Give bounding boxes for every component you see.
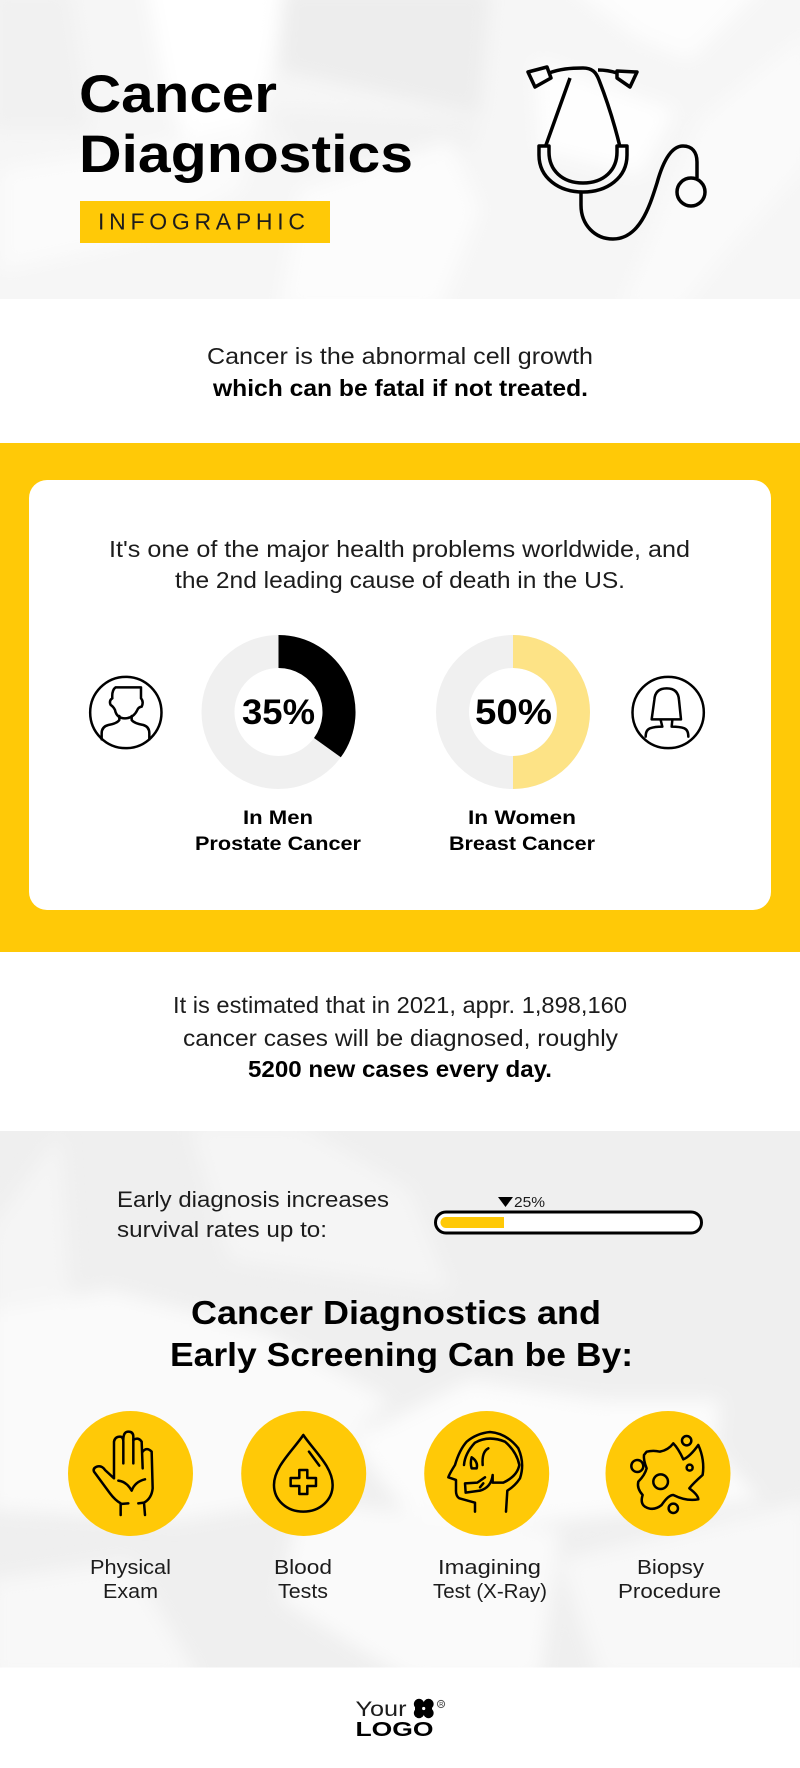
label: in men bbox=[195, 807, 361, 855]
icon: man bbox=[90, 677, 161, 748]
method: biopsy procedure: Procedure bbox=[618, 1580, 721, 1603]
donut chart: 35% in men: 35% bbox=[242, 693, 315, 732]
icon: cell bbox=[631, 1436, 703, 1513]
intro statement bbox=[207, 343, 593, 401]
estimate statement: cancer cases will be diagnosed, roughly bbox=[183, 1025, 619, 1051]
title: Cancer bbox=[79, 65, 277, 124]
logo: Your bbox=[356, 1698, 406, 1721]
method: physical exam bbox=[68, 1411, 193, 1603]
icon: woman bbox=[632, 677, 704, 748]
progress bar: 25%: 25% bbox=[514, 1194, 545, 1211]
estimate statement bbox=[173, 992, 627, 1082]
donut chart: 50% in women bbox=[452, 635, 590, 789]
icon: head x-ray bbox=[448, 1432, 522, 1512]
method: imaging test: Test (X-Ray) bbox=[433, 1580, 547, 1603]
title: Diagnostics bbox=[79, 125, 413, 184]
header background photo texture bbox=[0, 0, 800, 310]
intro statement: which can be fatal if not treated. bbox=[212, 375, 588, 401]
heading: Cancer Diagnostics and bbox=[191, 1294, 601, 1331]
method: biopsy procedure: Biopsy bbox=[637, 1556, 705, 1579]
method: imaging test bbox=[424, 1411, 549, 1603]
donut chart: 50% in women: 50% bbox=[475, 693, 552, 732]
method: blood tests: Blood bbox=[274, 1556, 332, 1579]
panel: yellow statistics band bbox=[0, 443, 800, 952]
logo bbox=[356, 1698, 445, 1741]
survival text bbox=[117, 1187, 389, 1242]
subtitle tag: INFOGRAPHIC bbox=[98, 208, 305, 234]
logo: R bbox=[439, 1702, 443, 1708]
estimate statement: 5200 new cases every day. bbox=[248, 1056, 552, 1082]
label: in women bbox=[449, 807, 595, 855]
card intro text: It's one of the major health problems worldwide, and bbox=[109, 536, 690, 562]
subtitle tag bbox=[80, 201, 330, 243]
panel: early diagnosis and screening bbox=[0, 1125, 800, 1680]
label: in women: Breast Cancer bbox=[449, 833, 595, 855]
icon: stethoscope bbox=[528, 67, 705, 239]
icon: blood drop bbox=[274, 1435, 333, 1512]
survival text: Early diagnosis increases bbox=[117, 1187, 389, 1212]
donut chart: 35% in men bbox=[218, 635, 356, 772]
label: in men: Prostate Cancer bbox=[195, 833, 361, 855]
icon: hand bbox=[94, 1432, 153, 1515]
method: physical exam: Physical bbox=[90, 1556, 171, 1579]
method: blood tests: Tests bbox=[278, 1580, 328, 1603]
section background photo texture bbox=[0, 1125, 800, 1680]
panel: header bbox=[0, 0, 800, 310]
card intro text: the 2nd leading cause of death in the US. bbox=[175, 567, 625, 593]
intro statement: Cancer is the abnormal cell growth bbox=[207, 343, 593, 369]
card intro text bbox=[109, 536, 690, 593]
heading bbox=[170, 1294, 633, 1373]
label: in men: In Men bbox=[243, 807, 313, 829]
logo: LOGO bbox=[356, 1719, 434, 1741]
method: blood tests bbox=[241, 1411, 366, 1603]
label: in women: In Women bbox=[468, 807, 576, 829]
estimate statement: It is estimated that in 2021, appr. 1,898,160 bbox=[173, 992, 627, 1018]
heading: Early Screening Can be By: bbox=[170, 1336, 633, 1373]
method: biopsy procedure bbox=[606, 1411, 730, 1603]
white statistics card bbox=[29, 480, 771, 910]
survival text: survival rates up to: bbox=[117, 1217, 327, 1242]
title bbox=[79, 65, 413, 184]
method: physical exam: Exam bbox=[103, 1580, 158, 1603]
method: imaging test: Imagining bbox=[438, 1556, 541, 1579]
progress bar: 25% bbox=[436, 1194, 702, 1233]
